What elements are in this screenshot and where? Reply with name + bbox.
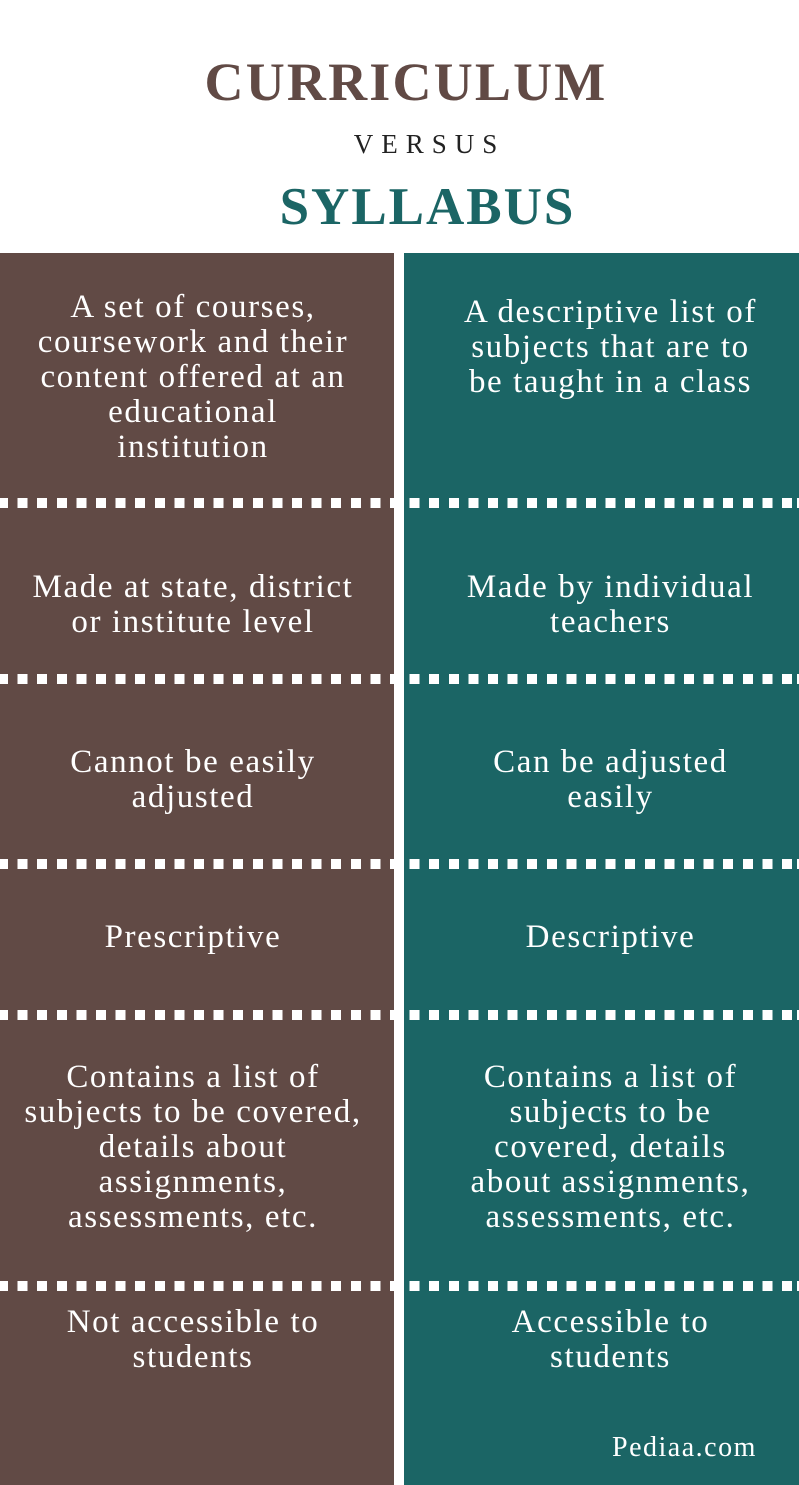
text: syllabus nature: Descriptive xyxy=(526,919,695,955)
text: syllabus access: Accessible to xyxy=(512,1304,709,1340)
text: curriculum maker xyxy=(33,569,353,640)
text: curriculum access: students xyxy=(133,1339,253,1375)
text: syllabus contents: covered, details xyxy=(494,1129,727,1165)
versus: VERSUS xyxy=(354,129,505,159)
text: curriculum definition xyxy=(38,289,348,465)
text: syllabus contents: Contains a list of xyxy=(484,1059,737,1095)
text: syllabus access xyxy=(512,1304,709,1375)
text: syllabus contents: about assignments, xyxy=(471,1164,750,1200)
text: curriculum definition: coursework and their xyxy=(38,324,348,360)
text: syllabus definition: subjects that are to xyxy=(471,329,750,365)
text: curriculum adjust: Cannot be easily xyxy=(70,744,316,780)
text: syllabus definition: be taught in a class xyxy=(469,364,752,400)
text: curriculum contents: assignments, xyxy=(99,1164,287,1200)
text: syllabus maker: teachers xyxy=(550,604,671,640)
text: curriculum maker: Made at state, district xyxy=(33,569,353,605)
text: syllabus maker: Made by individual xyxy=(467,569,754,605)
text: syllabus adjust: easily xyxy=(567,779,654,815)
text: syllabus contents: assessments, etc. xyxy=(486,1199,735,1235)
text: syllabus contents: subjects to be xyxy=(509,1094,712,1130)
text: syllabus adjust: Can be adjusted xyxy=(493,744,728,780)
text: curriculum definition: content offered at an xyxy=(40,359,346,395)
text: curriculum contents: assessments, etc. xyxy=(68,1199,318,1235)
text: syllabus contents xyxy=(471,1059,750,1235)
panel: syllabus column xyxy=(404,253,799,1485)
text: curriculum definition: educational xyxy=(108,394,278,430)
text: curriculum contents: subjects to be covered, xyxy=(24,1094,362,1130)
subtitle: SYLLABUS xyxy=(280,178,575,236)
logo: Pediaa.com xyxy=(612,1432,757,1463)
text: curriculum contents xyxy=(24,1059,362,1235)
text: syllabus maker xyxy=(467,569,754,640)
text: curriculum nature: Prescriptive xyxy=(105,919,281,955)
text: curriculum contents: details about xyxy=(99,1129,287,1165)
text: syllabus access: students xyxy=(550,1339,671,1375)
panel: curriculum column xyxy=(0,253,394,1485)
title: CURRICULUM xyxy=(204,52,607,112)
text: curriculum contents: Contains a list of xyxy=(66,1059,320,1095)
text: curriculum adjust xyxy=(70,744,316,815)
text: syllabus adjust xyxy=(493,744,728,815)
text: syllabus definition xyxy=(464,294,757,400)
text: curriculum access: Not accessible to xyxy=(67,1304,319,1340)
text: curriculum maker: or institute level xyxy=(71,604,315,640)
text: curriculum definition: A set of courses, xyxy=(70,289,316,325)
text: curriculum definition: institution xyxy=(117,429,269,465)
text: syllabus definition: A descriptive list of xyxy=(464,294,757,330)
text: curriculum adjust: adjusted xyxy=(132,779,254,815)
text: curriculum access xyxy=(67,1304,319,1375)
